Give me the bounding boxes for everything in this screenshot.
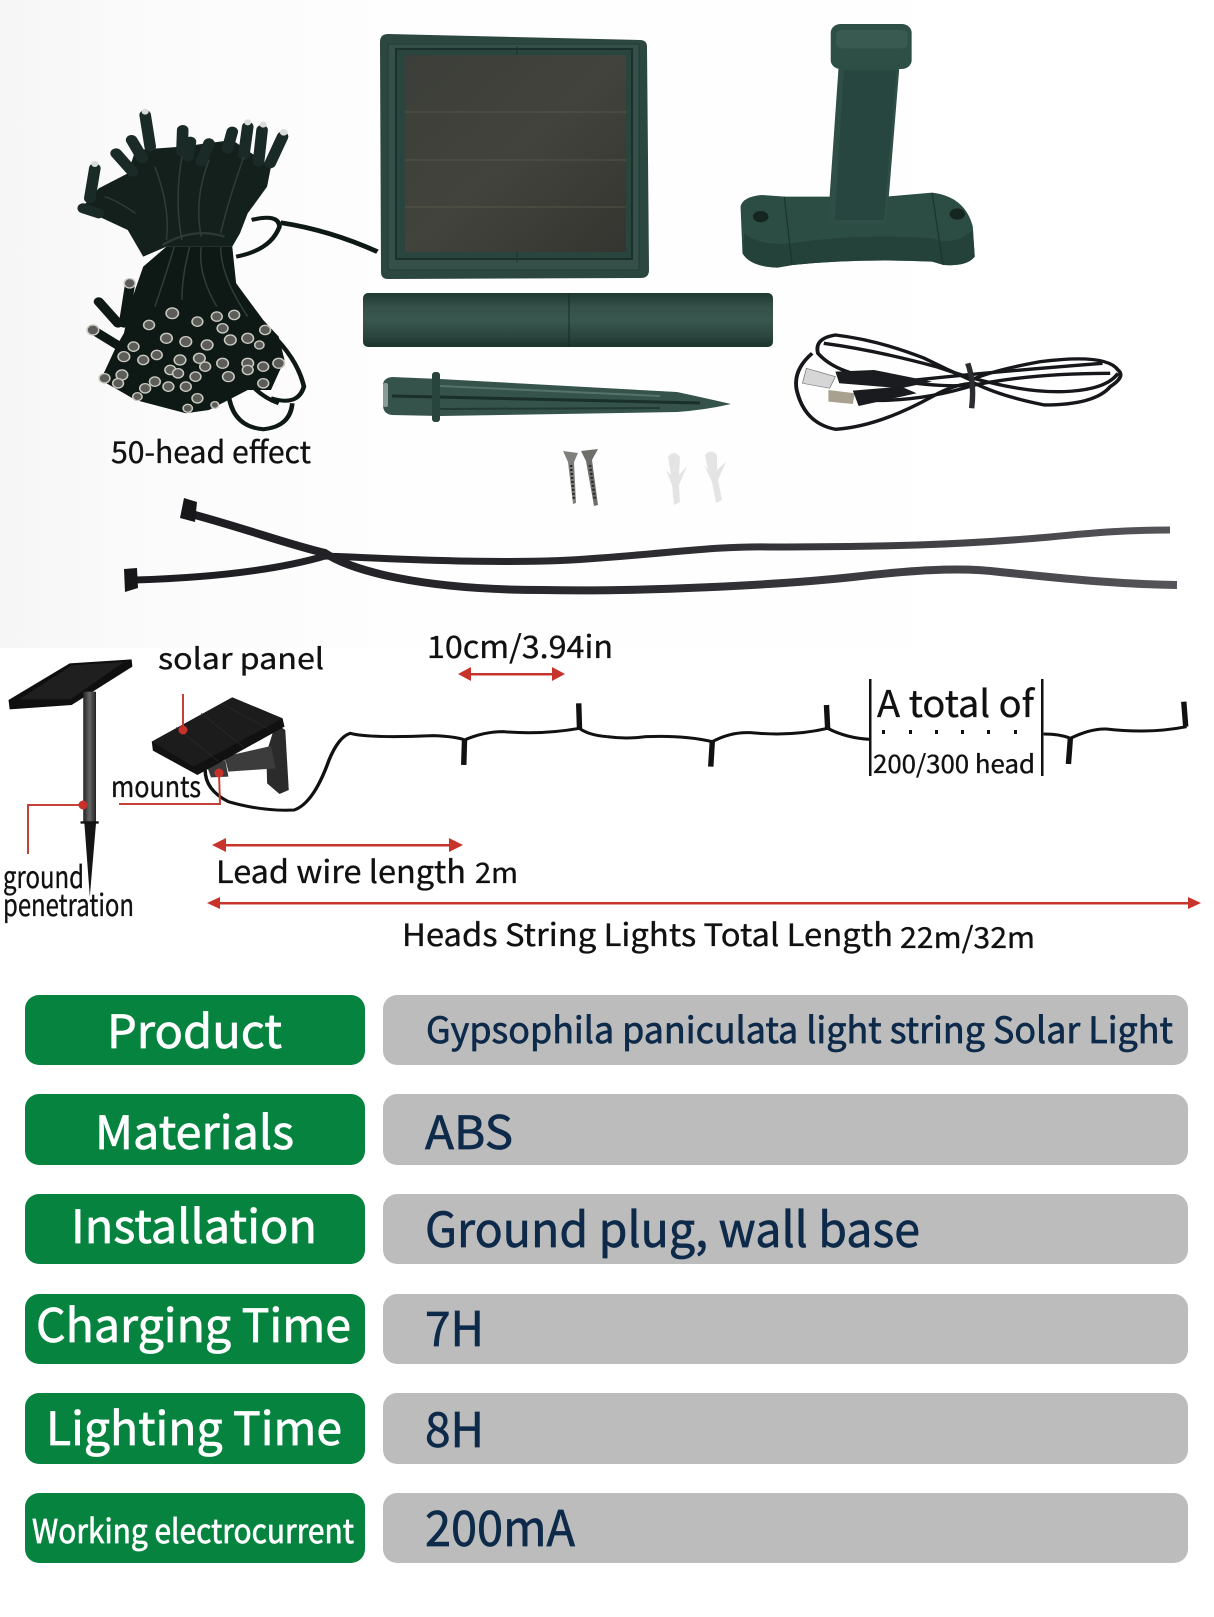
spec row: product: Gypsophila paniculata light string Solar Light — [426, 1002, 1173, 1054]
photo: tube — [363, 293, 773, 347]
photo: ground stake — [383, 372, 731, 422]
label: lead wire length: 2m — [475, 852, 518, 892]
photo panel background — [0, 0, 1214, 648]
photo: USB cable — [796, 335, 1121, 429]
text: 50-head effect: 50-head effect — [111, 428, 311, 472]
label: total length: Heads String Lights Total Length — [402, 910, 893, 955]
spec row: materials: Materials — [95, 1097, 294, 1163]
diagram: LED wire right part — [607, 702, 1186, 767]
label: 10cm/3.94in: 10cm/3.94in — [427, 622, 613, 667]
spec row: installation: Ground plug, wall base — [425, 1191, 920, 1261]
spec row: materials — [25, 1094, 1188, 1165]
photo: wall mount bracket — [741, 24, 975, 268]
diagram: wall mounted solar panel — [152, 697, 289, 794]
label: total length: 22m/32m — [900, 915, 1035, 957]
spec row: product: Product — [107, 996, 282, 1062]
label: ground penetration: ground — [3, 853, 84, 897]
spec row: lighting time: Lighting Time — [46, 1393, 342, 1459]
spec row: charging time: Charging Time — [36, 1290, 351, 1356]
photo: screws — [563, 449, 598, 506]
label: ground penetration: penetration — [3, 881, 134, 925]
arrow: lead wire length — [212, 838, 463, 852]
label: solar panel: solar panel — [158, 636, 324, 678]
spec row: lighting time — [25, 1391, 1188, 1464]
callout: a total of 200/300 head: 200/300 head — [873, 745, 1035, 781]
label: lead wire length: Lead wire length — [216, 847, 466, 892]
spec row: charging time: 7H — [425, 1290, 484, 1360]
leader lines and red dots — [28, 694, 224, 854]
spec row: product — [25, 995, 1188, 1065]
spec row: installation: Installation — [71, 1191, 317, 1257]
label: mounts: mounts — [111, 764, 201, 806]
diagram: stake solar light — [9, 659, 132, 897]
arrow: 10cm spacing — [458, 667, 565, 681]
arrow: total length — [207, 897, 1201, 909]
label: ground penetration — [3, 853, 134, 925]
spec row: charging time — [25, 1290, 1188, 1364]
spec row: working electrocurrent: Working electrocurrent — [32, 1505, 354, 1553]
diagram: LED wire — [205, 703, 607, 810]
photo: wall anchors — [666, 452, 726, 505]
photo: LED string bundle — [81, 109, 377, 429]
spec row: materials: ABS — [425, 1097, 513, 1163]
spec row: working electrocurrent — [25, 1490, 1188, 1563]
photo: cable ties — [124, 498, 1177, 592]
callout: a total of 200/300 head: A total of — [877, 674, 1036, 728]
spec row: installation — [25, 1191, 1188, 1264]
spec row: lighting time: 8H — [425, 1391, 484, 1461]
spec row: working electrocurrent: 200mA — [425, 1490, 575, 1561]
photo: solar panel — [380, 34, 649, 279]
callout: a total of 200/300 head — [869, 674, 1044, 781]
